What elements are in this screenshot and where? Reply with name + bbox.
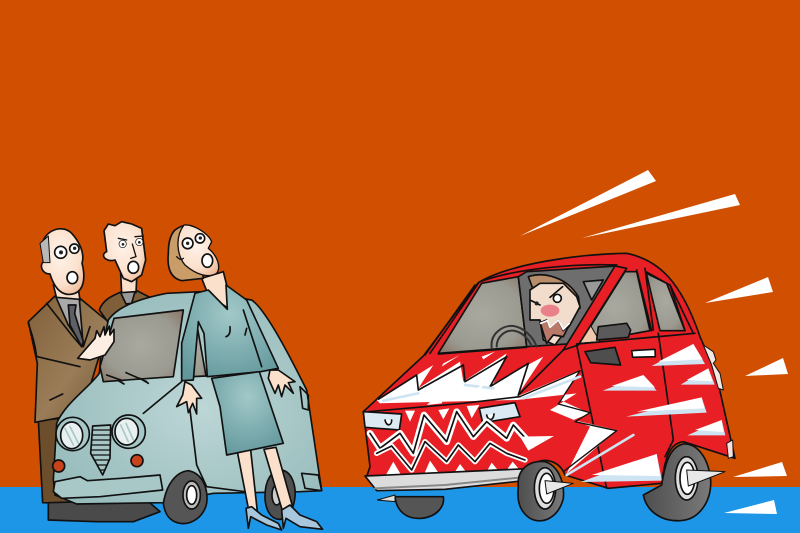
body bbox=[53, 292, 322, 504]
neck bbox=[121, 273, 137, 293]
head bbox=[104, 222, 146, 282]
bonnet front edge bbox=[368, 397, 520, 412]
cabin interior bbox=[518, 266, 617, 347]
red car with shark teeth bbox=[363, 253, 735, 521]
tyre bbox=[643, 444, 711, 521]
right hand bbox=[268, 370, 295, 397]
thick red A-pillar bbox=[563, 266, 627, 350]
pale blue streak shadows bbox=[581, 344, 725, 482]
speed lines bbox=[520, 170, 788, 514]
woman in teal suit bbox=[168, 225, 323, 530]
shoes bbox=[48, 500, 160, 522]
bumper bbox=[53, 475, 163, 498]
jacket bbox=[182, 285, 278, 381]
trousers bbox=[38, 417, 90, 503]
jacket detail lines bbox=[226, 310, 262, 367]
legs bbox=[237, 447, 294, 512]
rear wheel bbox=[265, 470, 295, 519]
driver bbox=[528, 275, 580, 345]
mouth teeth bbox=[368, 405, 554, 477]
windscreen bbox=[438, 277, 527, 353]
skirt bbox=[212, 372, 283, 455]
rear window bbox=[646, 272, 685, 331]
red flame fill between lines bbox=[427, 352, 495, 405]
head bbox=[41, 229, 84, 294]
grille bbox=[91, 425, 111, 475]
face bbox=[530, 283, 580, 345]
neck bbox=[202, 272, 228, 308]
indicators bbox=[53, 460, 65, 472]
shoes bbox=[246, 507, 282, 530]
bonnet zigzag flame bbox=[377, 352, 633, 475]
windscreen bbox=[100, 310, 183, 382]
face bbox=[178, 225, 219, 276]
side window bbox=[580, 272, 650, 343]
seat bbox=[597, 323, 631, 340]
front wheel bbox=[518, 461, 573, 521]
sleeve line bbox=[28, 323, 80, 367]
tail light bumps bbox=[703, 345, 723, 390]
spike on far wheel bbox=[377, 495, 395, 502]
left hand bbox=[177, 382, 202, 414]
door handle bbox=[632, 349, 655, 357]
lapels and pocket bbox=[47, 303, 90, 400]
hair bbox=[168, 225, 203, 281]
hair bbox=[40, 236, 50, 263]
driver arm bbox=[577, 323, 600, 343]
neck bbox=[53, 285, 80, 301]
old teal car bbox=[53, 292, 322, 524]
side window behind woman bbox=[192, 323, 206, 377]
suit jacket bbox=[28, 296, 115, 422]
background: blue ground bbox=[0, 487, 800, 533]
steering wheel bbox=[492, 326, 537, 347]
spike bbox=[687, 470, 725, 486]
right headlight bbox=[112, 415, 145, 448]
door outline bbox=[577, 333, 673, 488]
door mirror vent bbox=[585, 347, 621, 365]
grey shirt bbox=[121, 292, 135, 304]
roof pillars and rails bbox=[425, 265, 693, 395]
eyes, nose and mouth bbox=[119, 240, 126, 248]
angry eyes bbox=[530, 287, 563, 305]
bumper bbox=[365, 468, 536, 491]
left group: three onlookers and old car bbox=[28, 222, 323, 530]
wipers bbox=[107, 373, 148, 384]
eyes and mouth bbox=[55, 246, 67, 258]
car body bbox=[363, 253, 735, 488]
man's hand on car bbox=[78, 326, 114, 360]
hub bbox=[675, 457, 698, 500]
white flame streaks bbox=[592, 344, 723, 476]
far front wheel bbox=[395, 497, 444, 518]
shirt and tie bbox=[56, 297, 83, 347]
front wheel bbox=[163, 471, 207, 524]
cheek bbox=[541, 305, 559, 317]
hair bbox=[528, 275, 580, 313]
man in brown suit bbox=[28, 229, 160, 522]
eyes and mouth bbox=[182, 238, 193, 249]
younger man bbox=[99, 222, 150, 325]
jagged mouth bbox=[540, 320, 570, 343]
rear wheel bbox=[643, 444, 725, 521]
bonnet and door lines bbox=[143, 382, 322, 492]
shark eye headlights bbox=[363, 412, 402, 430]
left headlight bbox=[56, 417, 89, 451]
jacket bbox=[99, 291, 150, 325]
spike bbox=[545, 481, 573, 494]
